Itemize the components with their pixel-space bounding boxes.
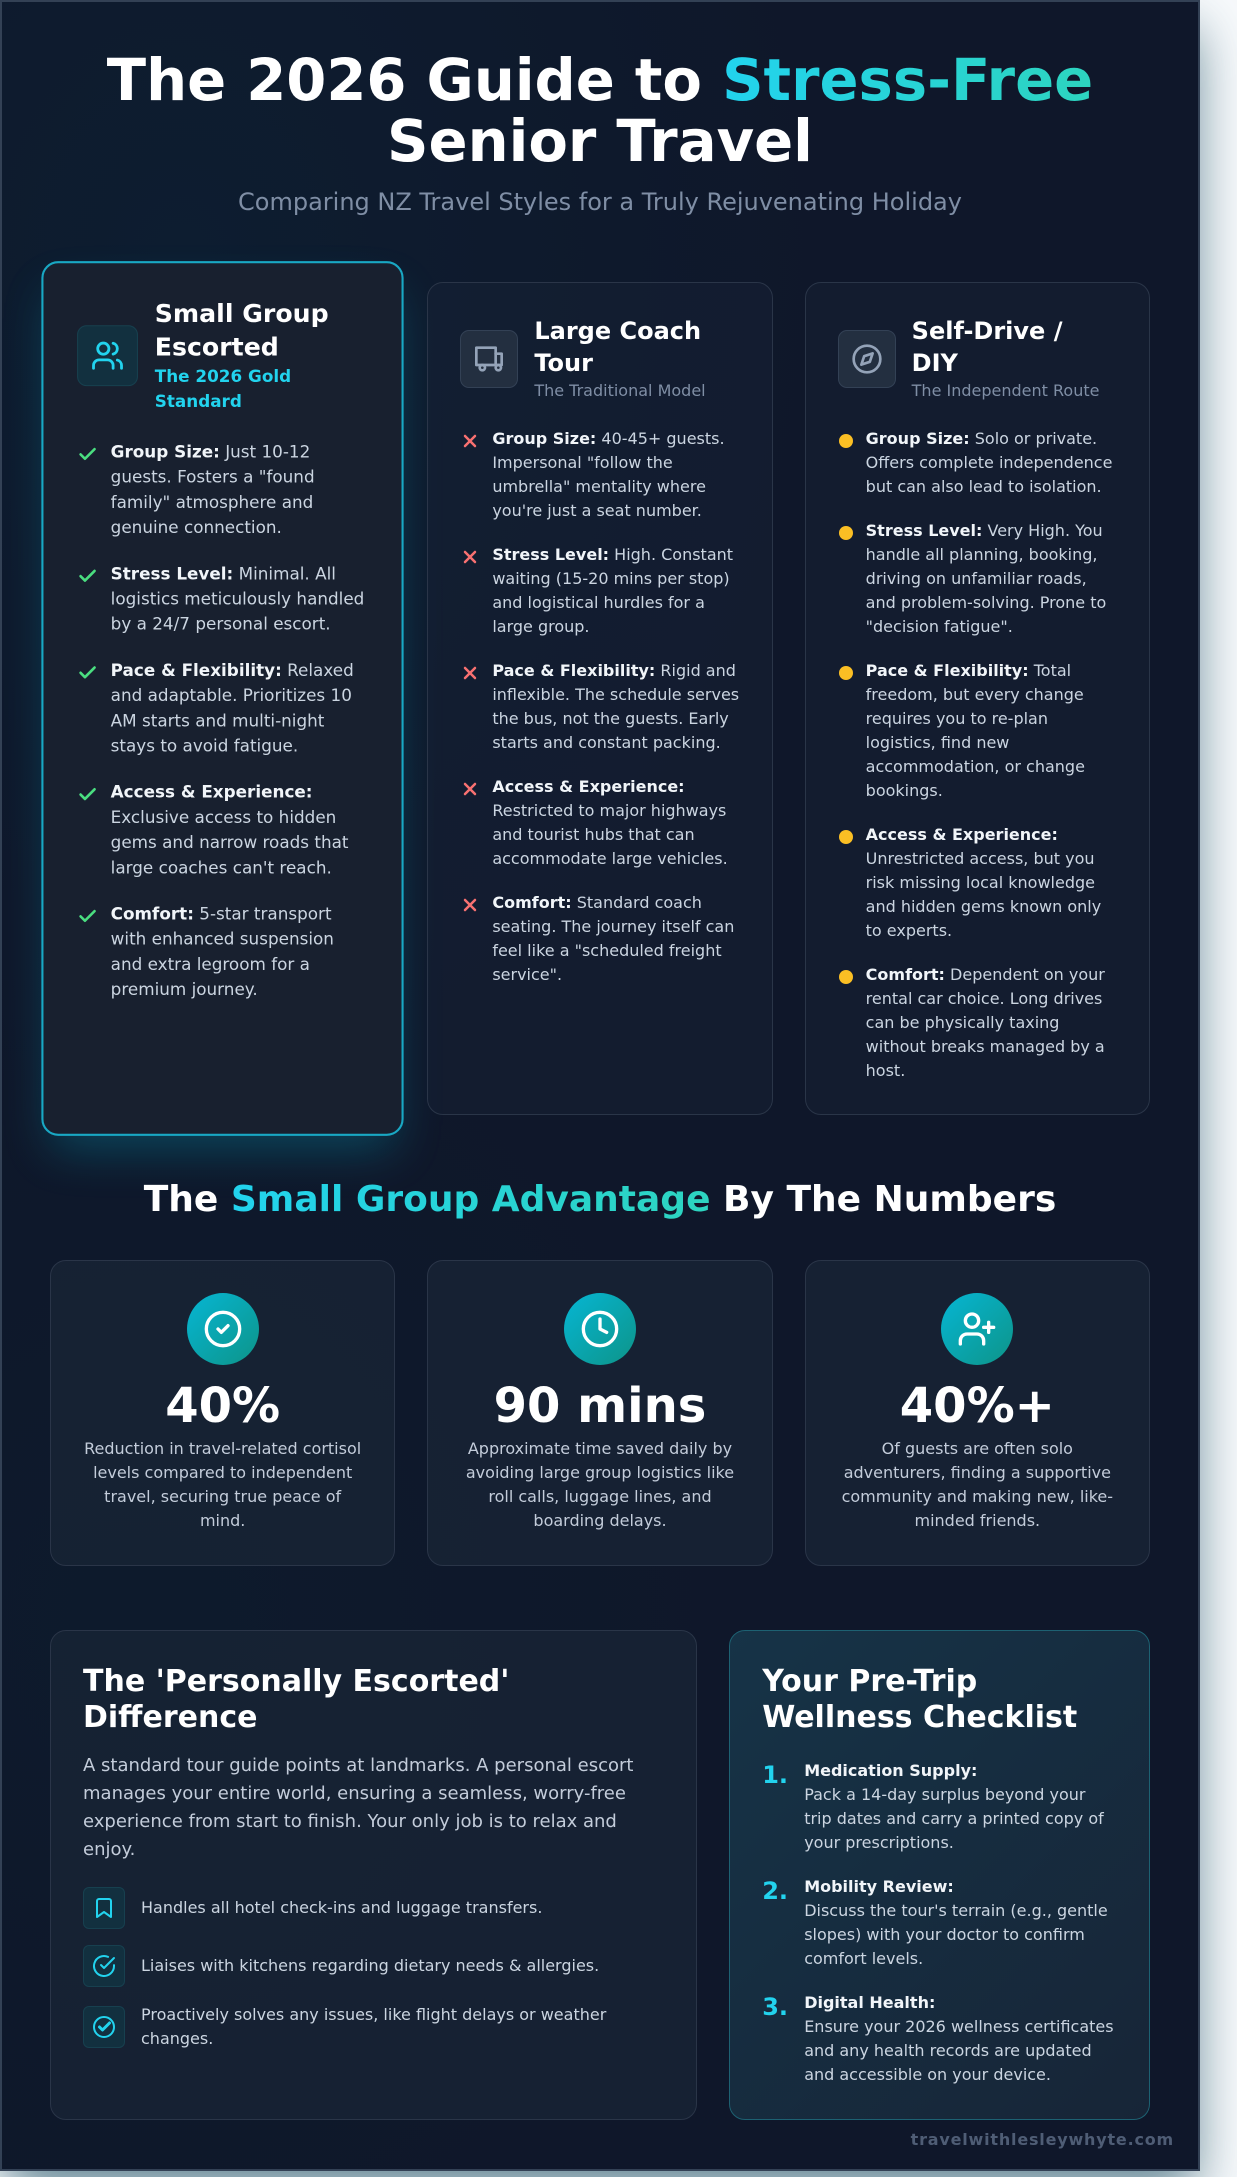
step 3: Ensure your 2026 wellness certificates and any health records are updated and accessible on your device. bbox=[804, 2017, 1114, 2084]
row: solves issues: Proactively solves any issues, like flight delays or weather changes. bbox=[141, 2004, 606, 2048]
icon: people bbox=[77, 325, 138, 386]
row: hotel check-ins: Handles all hotel check-ins and luggage transfers. bbox=[141, 1898, 542, 1916]
stat: 40%+ bbox=[805, 1260, 1150, 1566]
heading: small group bbox=[154, 299, 329, 411]
step 2: 2. bbox=[762, 1877, 788, 1905]
icon: compass bbox=[838, 330, 896, 388]
item: stress level: Stress Level: Minimal. All logistics meticulously handled by a 24/7 personal escort. bbox=[111, 564, 364, 634]
item: stress level: Stress Level: Very High. You handle all planning, booking, driving on unfamiliar roads, and problem-solving. Prone to "decision fatigue". bbox=[866, 521, 1106, 636]
subtitle: Comparing NZ Travel Styles for a Truly Rejuvenating Holiday bbox=[238, 188, 962, 216]
item: access: Access & Experience: Restricted to major highways and tourist hubs that can accommodate large vehicles. bbox=[492, 777, 728, 868]
item: comfort: Comfort: Standard coach seating. The journey itself can feel like a "scheduled freight service". bbox=[492, 893, 734, 984]
row: hotel check-ins bbox=[83, 1887, 542, 1929]
description: Of guests are often solo adventurers, finding a supportive community and making new, like-minded friends. bbox=[842, 1438, 1113, 1530]
step 1: Pack a 14-day surplus beyond your trip dates and carry a printed copy of your prescriptions. bbox=[804, 1785, 1104, 1852]
item: pace: Pace & Flexibility: Total freedom, but every change requires you to re-plan logistics, find new accommodation, or change bookings. bbox=[866, 661, 1085, 800]
heading: small group: The 2026 Gold Standard bbox=[155, 366, 291, 411]
body text: A standard tour guide points at landmarks. A personal escort manages your entire world, ensuring a seamless, worry-free experience from start to finish. Your only job is to relax and enjoy. bbox=[83, 1755, 633, 1860]
card header: self-drive bbox=[838, 317, 1099, 400]
item: comfort: Comfort: 5-star transport with enhanced suspension and extra legroom for a premium journey. bbox=[111, 904, 334, 999]
heading: large coach: The Traditional Model bbox=[534, 381, 706, 400]
icon: clock bbox=[564, 1293, 636, 1365]
heading: self-drive: The Independent Route bbox=[912, 381, 1099, 400]
icon: truck bbox=[460, 330, 518, 388]
title bbox=[107, 47, 1093, 174]
step 2 bbox=[762, 1877, 1108, 1968]
title: The 2026 Guide to Stress-Free bbox=[107, 47, 1093, 114]
row: kitchens: Liaises with kitchens regarding dietary needs & allergies. bbox=[141, 1956, 599, 1974]
website footer: travelwithlesleywhyte.com bbox=[911, 2130, 1174, 2149]
step 3 bbox=[762, 1993, 1114, 2084]
heading: small group: Small Group Escorted bbox=[155, 299, 329, 362]
heading: self-drive bbox=[912, 317, 1099, 400]
item: group size: Group Size: Solo or private. Offers complete independence but can also lead to isolation. bbox=[866, 429, 1112, 496]
icon: check circle bbox=[187, 1293, 259, 1365]
icon: user plus bbox=[941, 1293, 1013, 1365]
step 2: Mobility Review: bbox=[804, 1877, 954, 1896]
stat: 40% bbox=[50, 1260, 395, 1566]
item: stress level: Stress Level: High. Constant waiting (15-20 mins per stop) and logistical hurdles for a large group. bbox=[492, 545, 733, 636]
item: group size: Group Size: 40-45+ guests. Impersonal "follow the umbrella" mentality where you're just a seat number. bbox=[492, 429, 725, 520]
section heading: The Small Group Advantage By The Numbers bbox=[144, 1179, 1056, 1220]
card header: large coach bbox=[460, 317, 706, 400]
item: comfort: Comfort: Dependent on your rental car choice. Long drives can be physically taxing without breaks managed by a host. bbox=[866, 965, 1105, 1080]
description: Reduction in travel-related cortisol levels compared to independent travel, securing true peace of mind. bbox=[84, 1438, 361, 1530]
number: 40%+ bbox=[900, 1378, 1055, 1434]
step 3: 3. bbox=[762, 1993, 788, 2021]
panel: large coach tour bbox=[427, 282, 773, 1115]
panel: self-drive bbox=[805, 282, 1150, 1115]
stat: 90 mins bbox=[427, 1260, 773, 1566]
card header: small group bbox=[77, 299, 329, 411]
heading: Your Pre-Trip Wellness Checklist bbox=[762, 1664, 1077, 1735]
step 2: Discuss the tour's terrain (e.g., gentle slopes) with your doctor to confirm comfort levels. bbox=[804, 1901, 1108, 1968]
item: access: Access & Experience: Exclusive access to hidden gems and narrow roads that large coaches can't reach. bbox=[111, 782, 349, 878]
step 1 bbox=[762, 1761, 1104, 1852]
item: group size: Group Size: Just 10-12 guests. Fosters a "found family" atmosphere and genuine connection. bbox=[111, 442, 315, 537]
number: 90 mins bbox=[494, 1378, 706, 1434]
item: access: Access & Experience: Unrestricted access, but you risk missing local knowledge and hidden gems known only to experts. bbox=[866, 825, 1101, 940]
description: Approximate time saved daily by avoiding large group logistics like roll calls, luggage lines, and boarding delays. bbox=[466, 1438, 734, 1530]
item: pace: Pace & Flexibility: Rigid and inflexible. The schedule serves the bus, not the guests. Early starts and constant packing. bbox=[492, 661, 739, 752]
number: 40% bbox=[165, 1378, 280, 1434]
step 1: Medication Supply: bbox=[804, 1761, 977, 1780]
heading: self-drive: Self-Drive / DIY bbox=[912, 317, 1062, 377]
panel: wellness checklist bbox=[729, 1630, 1150, 2120]
panel: personally escorted difference bbox=[50, 1630, 697, 2120]
title: Senior Travel bbox=[387, 108, 813, 174]
row: kitchens bbox=[83, 1945, 599, 1987]
item: pace: Pace & Flexibility: Relaxed and adaptable. Prioritizes 10 AM starts and multi-night stays to avoid fatigue. bbox=[111, 660, 354, 756]
step 1: 1. bbox=[762, 1761, 788, 1789]
heading: The 'Personally Escorted' Difference bbox=[83, 1664, 509, 1735]
heading: large coach: Large Coach Tour bbox=[534, 317, 701, 377]
step 3: Digital Health: bbox=[804, 1993, 935, 2012]
panel: small group escorted bbox=[41, 261, 404, 1136]
